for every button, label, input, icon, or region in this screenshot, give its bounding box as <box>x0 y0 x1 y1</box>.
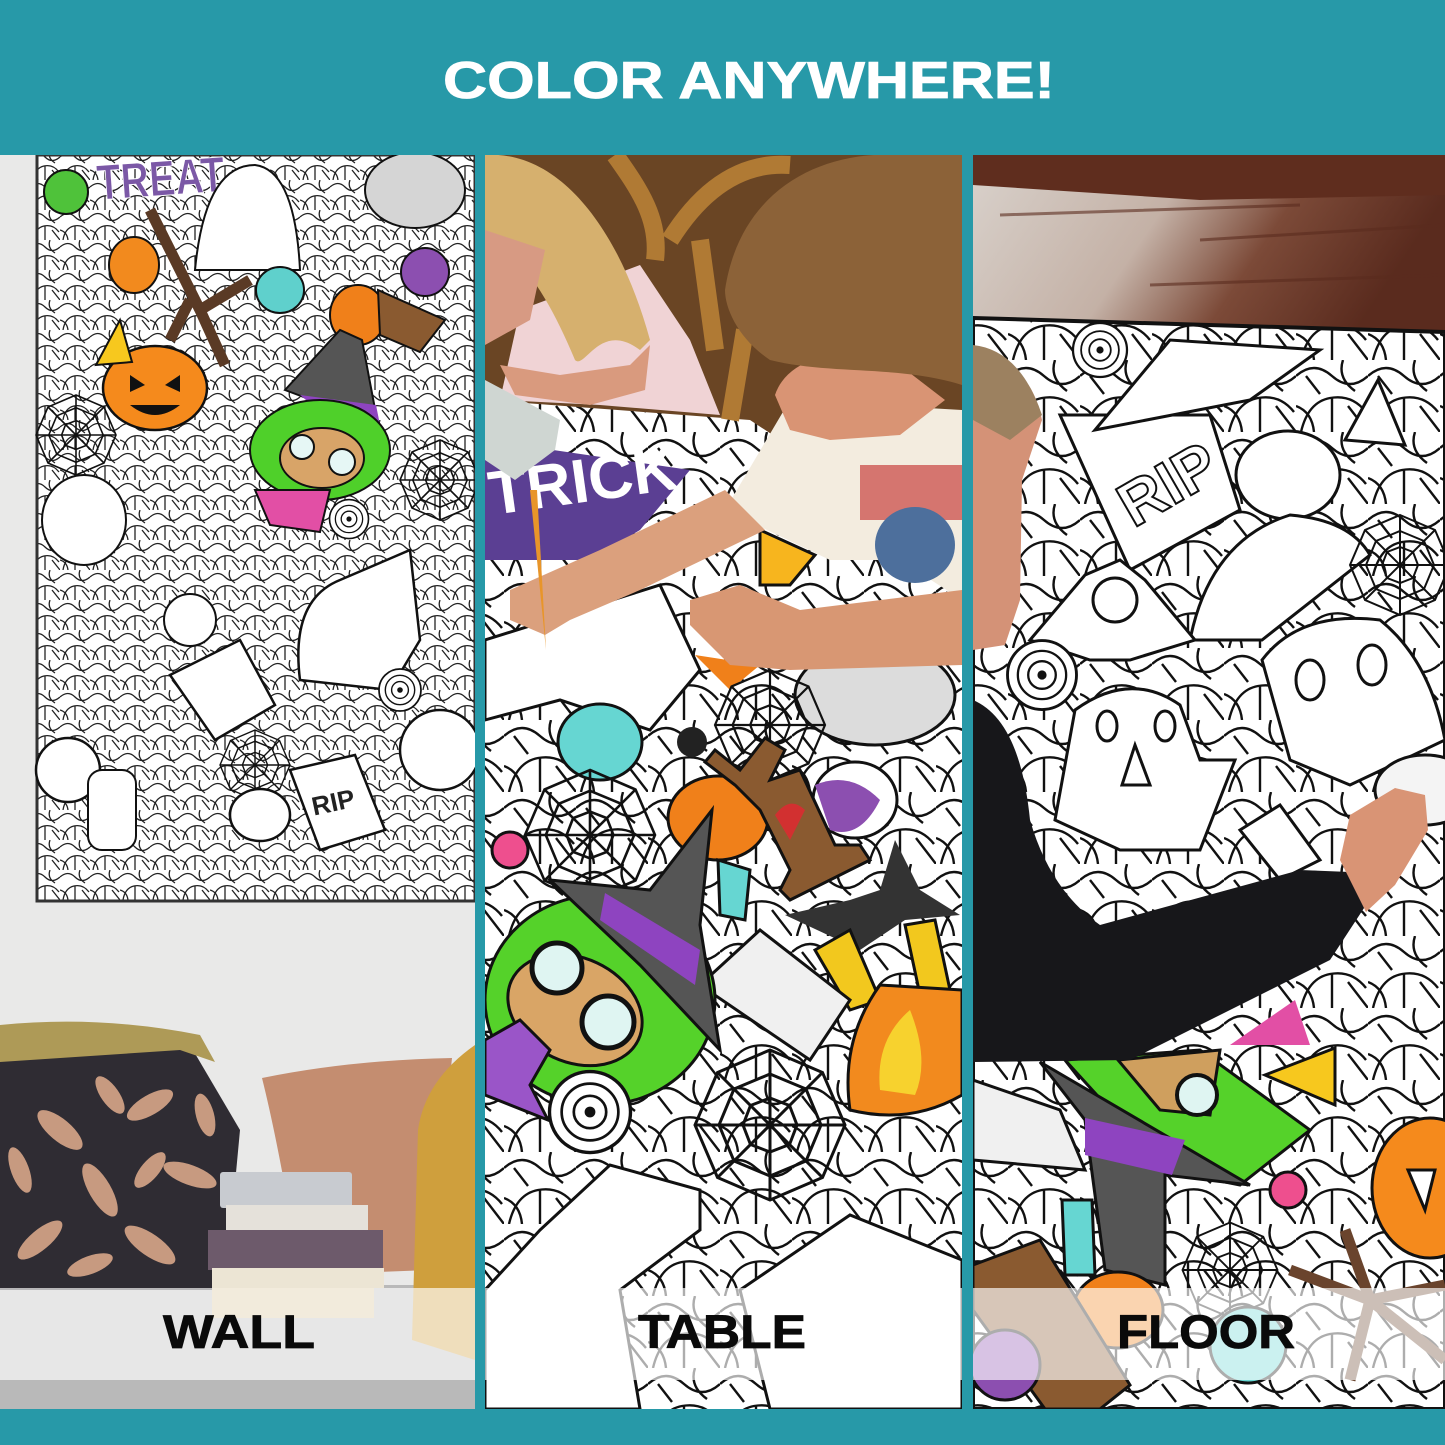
starburst <box>485 1020 550 1120</box>
chair back <box>615 155 790 420</box>
top wedge <box>1095 340 1320 430</box>
star dome <box>1190 515 1370 640</box>
poster on floor <box>970 318 1445 1409</box>
skull bones <box>88 770 136 850</box>
mustard chair <box>412 1045 475 1360</box>
witch legs <box>815 920 950 1010</box>
pink candy <box>1270 1172 1306 1208</box>
poster on table <box>484 400 962 1409</box>
treat lettering: TREAT <box>95 146 226 211</box>
label strip: table <box>485 1288 962 1380</box>
grey skull <box>795 645 955 745</box>
small bat <box>1240 805 1320 880</box>
man's black sweater arm <box>973 700 1366 1062</box>
pink star <box>1230 1000 1310 1045</box>
spotted mushroom <box>1375 755 1445 825</box>
footer band <box>0 1409 1445 1445</box>
trick lettering <box>485 450 690 560</box>
frankenstein bottom <box>740 1215 962 1409</box>
frankenstein <box>170 640 275 740</box>
branches <box>1290 1230 1445 1380</box>
label strip: wall <box>0 1288 475 1380</box>
candy corn <box>1345 380 1405 445</box>
cross tombstone <box>705 738 870 900</box>
yellow candy corn <box>96 320 132 365</box>
title: COLOR ANYWHERE! <box>443 52 1055 110</box>
small spider <box>677 727 707 757</box>
girl <box>485 155 720 415</box>
large ghost bottom <box>485 1165 700 1409</box>
green mushroom <box>44 170 88 214</box>
label strip: floor <box>973 1288 1445 1380</box>
basket <box>0 1022 240 1290</box>
orange piece <box>695 655 760 690</box>
purple potion <box>401 248 449 296</box>
poster on wall <box>36 146 480 901</box>
fire <box>848 985 962 1115</box>
pumpkin outline low <box>230 789 290 841</box>
stack of books <box>208 1172 384 1318</box>
wrapped candy <box>1062 1200 1095 1275</box>
panel: table <box>484 155 962 1409</box>
header band <box>0 0 1445 155</box>
rip stone <box>1060 415 1240 570</box>
candy corn color <box>1265 1048 1335 1105</box>
swirl top <box>1073 323 1127 377</box>
web <box>36 395 116 475</box>
potion <box>813 762 897 838</box>
jack-o-lantern floor <box>1372 1118 1445 1258</box>
ghost on table <box>485 585 700 730</box>
bone card <box>973 1080 1085 1170</box>
bat <box>785 840 960 950</box>
label: wall: WALL <box>163 1305 315 1358</box>
trick lettering: TRICK <box>484 434 682 529</box>
crayon box <box>485 380 560 480</box>
wrapped candy <box>718 860 750 920</box>
floor rug <box>0 1285 475 1409</box>
web left <box>525 770 655 900</box>
teal mushroom <box>256 267 304 313</box>
label: floor: FLOOR <box>1117 1305 1295 1358</box>
spider web <box>400 440 480 520</box>
panel: wall <box>0 146 480 1409</box>
web pair <box>220 730 290 800</box>
swirl candy <box>330 500 368 538</box>
small orange pumpkin <box>330 285 386 345</box>
lollipop <box>1008 640 1076 710</box>
candy corn <box>760 530 815 585</box>
grey skull top right <box>365 152 465 228</box>
pumpkin outline <box>400 710 480 790</box>
swirl <box>550 1072 630 1152</box>
brown tombstone <box>378 290 445 352</box>
wood floor <box>973 155 1445 330</box>
large web bottom <box>695 1050 845 1200</box>
boy <box>510 155 962 670</box>
orange pumpkin <box>668 776 768 860</box>
teal mushroom <box>558 704 642 780</box>
witch <box>485 810 720 1105</box>
pumpkin color <box>1073 1272 1163 1348</box>
web lower <box>1182 1222 1278 1318</box>
orange striped candy <box>109 237 159 293</box>
ghost <box>195 165 300 270</box>
large web top <box>715 670 825 780</box>
witch <box>250 330 390 532</box>
round lollipop <box>379 669 421 711</box>
RIP stone: RIP <box>309 783 357 821</box>
skull <box>42 475 126 565</box>
man's head <box>973 345 1042 650</box>
witch <box>1040 1050 1310 1285</box>
pink candy <box>492 832 528 868</box>
bone card <box>700 930 850 1060</box>
ghost floor <box>1055 689 1235 850</box>
large ghost <box>298 550 420 690</box>
pencil <box>530 490 546 650</box>
potion <box>164 594 216 646</box>
pumpkin outline <box>1236 431 1340 519</box>
panel: floor <box>970 155 1445 1409</box>
bat cat <box>1030 560 1195 660</box>
rip stone: RIP <box>1106 429 1230 540</box>
pumpkin outline left <box>36 738 100 802</box>
RIP stone <box>290 755 385 850</box>
pillow <box>262 1058 452 1275</box>
man's hand <box>1340 788 1428 912</box>
frankenstein tombstone <box>1262 618 1445 785</box>
yellow flame <box>879 1010 921 1095</box>
bare branches <box>150 210 250 365</box>
tombstone wood <box>973 1240 1130 1409</box>
label: table: TABLE <box>638 1305 806 1358</box>
teal mushroom <box>1210 1307 1286 1383</box>
jack-o-lantern <box>103 346 207 430</box>
web <box>1350 515 1445 615</box>
purple potion <box>970 1330 1040 1400</box>
